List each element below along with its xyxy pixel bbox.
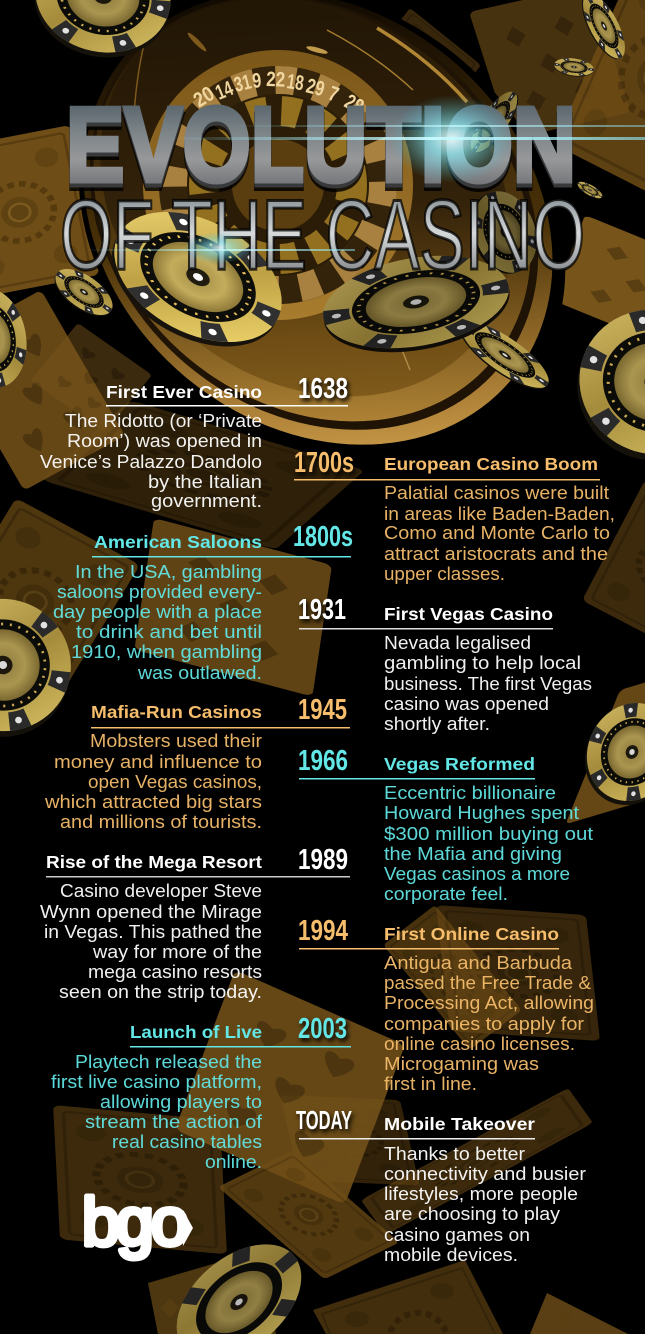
entry: 1994 First Online Casino: Microgaming was bbox=[384, 1054, 539, 1074]
entry: 1700s European Casino Boom bbox=[294, 447, 615, 584]
entry: 1989 Rise of the Mega Resort: Casino developer Steve bbox=[60, 881, 262, 901]
entry: 1989 Rise of the Mega Resort: 1989 bbox=[298, 844, 348, 876]
entry: 1945 Mafia-Run Casinos: open Vegas casinos, bbox=[88, 772, 262, 792]
entry: 1700s European Casino Boom: upper classes. bbox=[384, 564, 505, 584]
entry: 1638 First Ever Casino: Room’) was opened in bbox=[67, 431, 262, 451]
entry: 1945 Mafia-Run Casinos: and millions of tourists. bbox=[60, 812, 262, 832]
entry: 1994 First Online Casino: first in line. bbox=[384, 1074, 477, 1094]
entry: Today Mobile Takeover: Mobile Takeover bbox=[384, 1114, 535, 1134]
entry: 1989 Rise of the Mega Resort bbox=[40, 844, 350, 1002]
entry: Today Mobile Takeover: lifestyles, more people bbox=[384, 1184, 578, 1204]
entry: 1931 First Vegas Casino: gambling to help local bbox=[384, 653, 581, 673]
entry: 1931 First Vegas Casino: business. The first Vegas bbox=[384, 674, 592, 694]
entry: 1966 Vegas Reformed: Eccentric billionaire bbox=[384, 783, 556, 803]
entry: 1966 Vegas Reformed: corporate feel. bbox=[384, 884, 508, 904]
entry: 1966 Vegas Reformed: Howard Hughes spent bbox=[384, 803, 579, 823]
entry: 2003 Launch of Live: Launch of Live bbox=[130, 1022, 262, 1042]
entry: 1800s American Saloons: was outlawed. bbox=[137, 663, 262, 683]
entry: 1989 Rise of the Mega Resort: seen on the strip today. bbox=[59, 982, 262, 1002]
entry: 1931 First Vegas Casino bbox=[298, 594, 592, 734]
entry: 1994 First Online Casino: Antigua and Barbuda bbox=[384, 953, 573, 973]
entry: 1994 First Online Casino: passed the Free Trade & bbox=[384, 973, 591, 993]
roulette wheel numbers: 18 bbox=[285, 70, 306, 95]
entry: 1989 Rise of the Mega Resort: way for more of the bbox=[92, 942, 262, 962]
entry: 1966 Vegas Reformed: $300 million buying out bbox=[384, 824, 593, 844]
entry: 1931 First Vegas Casino: shortly after. bbox=[384, 714, 490, 734]
entry: 1989 Rise of the Mega Resort: Wynn opened the Mirage bbox=[40, 902, 262, 922]
entry: 2003 Launch of Live: Playtech released the bbox=[75, 1052, 262, 1072]
entry: 1638 First Ever Casino: Venice’s Palazzo Dandolo bbox=[40, 452, 262, 472]
entry: Today Mobile Takeover: Thanks to better bbox=[384, 1144, 525, 1164]
entry: 1966 Vegas Reformed: the Mafia and giving bbox=[384, 844, 562, 864]
entry: 1931 First Vegas Casino: First Vegas Casino bbox=[384, 604, 553, 624]
roulette wheel numbers bbox=[189, 68, 368, 119]
entry: 1994 First Online Casino: companies to apply for bbox=[384, 1014, 584, 1034]
entry: 1945 Mafia-Run Casinos: Mafia-Run Casinos bbox=[91, 702, 262, 722]
entry: 1638 First Ever Casino: by the Italian bbox=[148, 472, 262, 492]
entry: 1945 Mafia-Run Casinos: which attracted big stars bbox=[44, 792, 262, 812]
entry: 1638 First Ever Casino: First Ever Casino bbox=[106, 382, 262, 402]
entry: 1800s American Saloons: to drink and bet until bbox=[76, 622, 262, 642]
poker chips, upper area bbox=[0, 0, 645, 482]
roulette wheel bbox=[0, 0, 645, 554]
entry: 1966 Vegas Reformed: Vegas casinos a more bbox=[384, 864, 570, 884]
entry: 1994 First Online Casino bbox=[298, 915, 594, 1094]
entry: 1945 Mafia-Run Casinos: 1945 bbox=[298, 694, 347, 726]
entry: 1700s European Casino Boom: Como and Monte Carlo to bbox=[384, 523, 610, 543]
entry: 1700s European Casino Boom: in areas like Baden-Baden, bbox=[384, 504, 615, 524]
entry: 2003 Launch of Live: allowing players to bbox=[100, 1092, 262, 1112]
logo: bgo: bgo bbox=[82, 1184, 189, 1260]
entry: 1994 First Online Casino: online casino licenses. bbox=[384, 1034, 575, 1054]
roulette wheel numbers: 29 bbox=[304, 75, 327, 101]
entry: 1638 First Ever Casino: 1638 bbox=[298, 373, 348, 405]
roulette wheel numbers: 28 bbox=[341, 90, 368, 119]
entry: 2003 Launch of Live bbox=[51, 1013, 351, 1172]
entry: 1800s American Saloons: In the USA, gambling bbox=[75, 562, 262, 582]
entry: 1700s European Casino Boom: attract aristocrats and the bbox=[384, 544, 608, 564]
entry: 1700s European Casino Boom: Palatial casinos were built bbox=[384, 483, 609, 503]
roulette wheel numbers: 31 bbox=[232, 70, 254, 97]
roulette wheel numbers: 14 bbox=[212, 77, 237, 105]
chip at bottom edge bbox=[177, 1226, 319, 1334]
entry: 1638 First Ever Casino: government. bbox=[151, 491, 262, 511]
entry: 2003 Launch of Live: online. bbox=[205, 1152, 262, 1172]
light flares bbox=[85, 95, 645, 264]
entry: 1994 First Online Casino: First Online Casino bbox=[384, 924, 559, 944]
roulette wheel numbers: 7 bbox=[325, 82, 342, 107]
entry: 1800s American Saloons: American Saloons bbox=[94, 532, 262, 552]
entry: 1700s European Casino Boom: European Casino Boom bbox=[384, 454, 598, 474]
entry: 1989 Rise of the Mega Resort: in Vegas. This pathed the bbox=[44, 922, 262, 942]
entry: 1700s European Casino Boom: 1700s bbox=[294, 447, 354, 479]
entry: 1989 Rise of the Mega Resort: mega casino resorts bbox=[88, 962, 262, 982]
entry: Today Mobile Takeover: are choosing to play bbox=[384, 1204, 560, 1224]
chips, lower area bbox=[0, 584, 645, 1334]
entry: 1945 Mafia-Run Casinos: Mobsters used their bbox=[90, 731, 262, 751]
entry: 1638 First Ever Casino: The Ridotto (or ‘Private bbox=[65, 411, 262, 431]
entry: 2003 Launch of Live: 2003 bbox=[298, 1013, 347, 1045]
entry: 1638 First Ever Casino bbox=[40, 373, 348, 511]
entry: 1989 Rise of the Mega Resort: Rise of the Mega Resort bbox=[46, 852, 262, 872]
entry: 1800s American Saloons bbox=[53, 521, 353, 683]
entry: 1800s American Saloons: 1910, when gambling bbox=[71, 642, 262, 662]
entry: Today Mobile Takeover: connectivity and busier bbox=[384, 1164, 586, 1184]
entry: 2003 Launch of Live: first live casino platform, bbox=[51, 1072, 262, 1092]
entry: 1966 Vegas Reformed: 1966 bbox=[298, 745, 348, 777]
entry: 1931 First Vegas Casino: casino was opened bbox=[384, 694, 549, 714]
roulette wheel numbers: 22 bbox=[266, 68, 286, 92]
roulette wheel numbers: 20 bbox=[189, 82, 219, 112]
entry: 1994 First Online Casino: Processing Act, allowing bbox=[384, 993, 594, 1013]
entry: 1945 Mafia-Run Casinos bbox=[44, 694, 350, 832]
entry: 2003 Launch of Live: stream the action of bbox=[85, 1112, 263, 1132]
entry: 1945 Mafia-Run Casinos: money and influence to bbox=[54, 752, 262, 772]
entry: 1800s American Saloons: day people with a place bbox=[53, 602, 262, 622]
entry: 1966 Vegas Reformed bbox=[298, 745, 593, 904]
entry: 1966 Vegas Reformed: Vegas Reformed bbox=[384, 754, 535, 774]
entry: Today Mobile Takeover bbox=[296, 1105, 586, 1265]
roulette wheel numbers: 9 bbox=[251, 69, 262, 93]
entry: 1931 First Vegas Casino: 1931 bbox=[298, 594, 346, 626]
entry: Today Mobile Takeover: mobile devices. bbox=[384, 1245, 518, 1265]
entry: 1800s American Saloons: saloons provided every- bbox=[57, 582, 262, 602]
entry: Today Mobile Takeover: casino games on bbox=[384, 1225, 530, 1245]
entry: 2003 Launch of Live: real casino tables bbox=[112, 1132, 262, 1152]
title bbox=[60, 86, 645, 290]
entry: Today Mobile Takeover: TODAY bbox=[296, 1105, 352, 1135]
entry: 1994 First Online Casino: 1994 bbox=[298, 915, 348, 947]
entry: 1800s American Saloons: 1800s bbox=[293, 521, 353, 553]
entry: 1931 First Vegas Casino: Nevada legalised bbox=[384, 633, 531, 653]
